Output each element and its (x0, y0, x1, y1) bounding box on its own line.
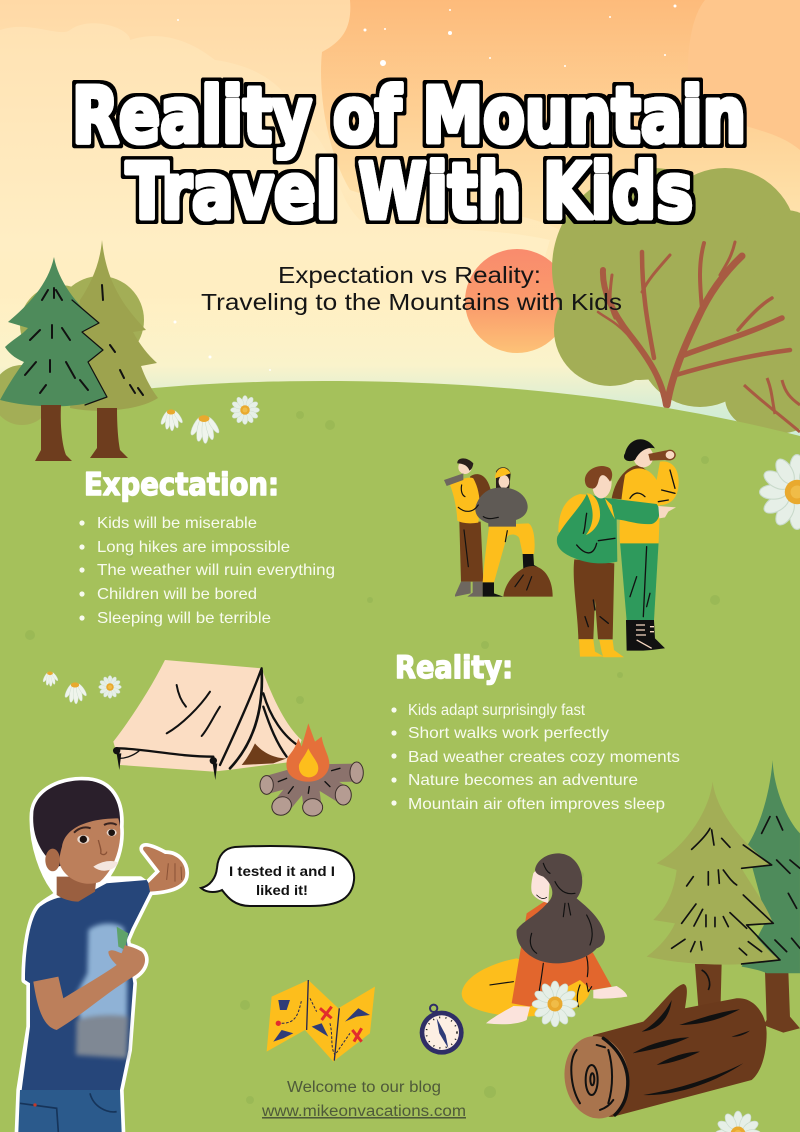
eyes and brows (74, 823, 117, 844)
binocular woman backpack (612, 465, 650, 500)
ink lines (577, 470, 675, 627)
nose and mouth (98, 840, 107, 855)
binocular woman jacket (620, 461, 679, 543)
binocular woman trousers (620, 542, 659, 621)
log (559, 984, 767, 1123)
flame (286, 723, 329, 782)
ink lines (458, 485, 532, 590)
daisy near girl (532, 981, 578, 1027)
raised hand (143, 847, 185, 892)
title (72, 72, 746, 237)
reality heading: Reality: (395, 650, 513, 686)
footer blog text: www.mikeonvacations.com (261, 1103, 466, 1120)
expectation list (79, 515, 335, 627)
olive pine (70, 240, 158, 411)
tree foliage (552, 168, 800, 407)
expectation list: The weather will ruin everything (97, 562, 335, 579)
reality list: Mountain air often improves sleep (408, 796, 665, 813)
man head and hair (458, 461, 472, 474)
rock (503, 566, 553, 597)
olive foliage behind (0, 276, 144, 425)
face (531, 870, 550, 903)
pointing person head (592, 474, 612, 498)
hair and clothing ink (490, 863, 592, 1007)
binocular woman boots (626, 620, 665, 651)
speech bubble: I tested it and I (229, 863, 335, 879)
campfire (260, 723, 363, 819)
reality list: Short walks work perfectly (408, 725, 609, 742)
face (60, 818, 120, 884)
pointing person backpack (558, 494, 597, 537)
jeans (18, 1090, 122, 1132)
logs (267, 773, 357, 807)
orange top (512, 900, 612, 1007)
subtitle: Expectation vs Reality: (278, 262, 541, 288)
expectation list: Long hikes are impossible (97, 539, 290, 556)
sky background (0, 0, 800, 440)
green pine trunk (35, 405, 72, 461)
olive pine right (647, 782, 780, 1007)
pointing hand (658, 506, 676, 518)
green pine right (742, 760, 800, 1033)
binoculars (648, 450, 676, 461)
hair (33, 780, 120, 867)
forest, log and girl scene (420, 760, 800, 1123)
shirt graphic (75, 923, 128, 1058)
tree branches (598, 242, 790, 405)
backpack straps (586, 493, 615, 535)
daisies: top left group (159, 395, 260, 443)
forearm and lower hand (33, 945, 145, 1030)
long hair (517, 853, 605, 963)
green pine jagged edge (72, 300, 107, 405)
green pine (0, 257, 107, 406)
footer blog text: Welcome to our blog (287, 1079, 441, 1096)
man pants (459, 522, 483, 582)
man boots (455, 582, 483, 597)
yellow trousers (462, 958, 590, 1017)
expectation list: Kids will be miserable (97, 515, 257, 532)
woman head and hat (496, 467, 511, 488)
binocular woman head (633, 446, 653, 467)
pointing person pants (574, 559, 614, 639)
shirt (22, 880, 152, 1090)
ear (45, 849, 60, 871)
hill ground (0, 381, 800, 1132)
woman boots (483, 554, 538, 597)
man jacket (450, 478, 480, 523)
boy photo cut-out (18, 780, 185, 1132)
tent and campfire (113, 660, 363, 819)
panel: expectation (79, 467, 335, 627)
expectation list: Sleeping will be terrible (97, 610, 271, 627)
front hikers pair (557, 439, 679, 657)
man cup (444, 473, 463, 486)
compass (420, 1005, 464, 1055)
speech bubble (201, 846, 354, 906)
hikers illustration (444, 439, 679, 657)
olive pine trunk (90, 408, 128, 458)
woman sweater (475, 488, 528, 527)
sun (465, 249, 569, 353)
reality list (391, 702, 680, 813)
pine needle marks (25, 285, 143, 395)
daisy: right edge (760, 455, 800, 529)
reality list: Nature becomes an adventure (408, 772, 638, 789)
footer blog text (261, 1079, 466, 1120)
speech bubble: liked it! (256, 882, 308, 898)
daisy: bottom right (715, 1111, 761, 1132)
pointing person boots (579, 639, 624, 657)
pointing person sweater (557, 494, 659, 563)
girl sitting (462, 853, 627, 1024)
reality list: Kids adapt surprisingly fast (408, 702, 586, 719)
reality list: Bad weather creates cozy moments (408, 749, 680, 766)
backpack (470, 474, 491, 505)
map icon (267, 980, 375, 1062)
subtitle: Traveling to the Mountains with Kids (201, 289, 622, 315)
expectation heading: Expectation: (84, 467, 279, 503)
rear hikers pair (444, 458, 553, 597)
panel: reality (391, 650, 680, 813)
subtitle (201, 262, 622, 315)
expectation list: Children will be bored (97, 586, 257, 603)
white sticker outline (18, 780, 185, 1132)
left pine trees (0, 240, 158, 461)
woman pants (483, 523, 535, 582)
right big tree (552, 168, 800, 407)
neck (57, 877, 97, 902)
ground texture spots (25, 411, 720, 1104)
tent (113, 660, 302, 780)
daisies: middle left group (42, 671, 121, 704)
hands and feet (486, 986, 627, 1024)
right small tree (725, 362, 800, 434)
